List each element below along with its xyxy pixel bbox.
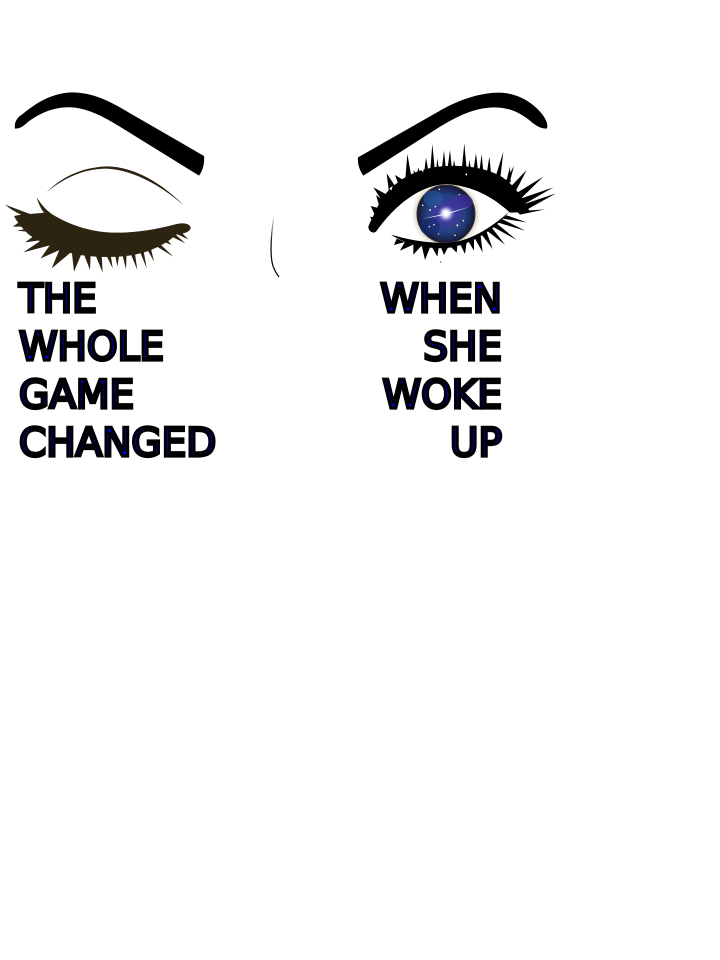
- right headline: [380, 277, 502, 466]
- right open eye: [368, 143, 556, 263]
- sclera: [378, 184, 508, 245]
- stray lash specks: [440, 261, 441, 263]
- left headline: CHANGED: [19, 421, 216, 466]
- left headline: GAME: [19, 373, 134, 418]
- lower lid line: [391, 212, 509, 248]
- sclera shading: [411, 179, 481, 249]
- closed eyelashes: [5, 205, 188, 273]
- left headline: [18, 277, 216, 466]
- upper lid crease: [47, 166, 184, 205]
- upper lash gaps: [389, 169, 467, 191]
- right headline: UP: [450, 421, 502, 466]
- closed eyelid band: [14, 197, 191, 257]
- right headline: WHEN: [380, 277, 502, 322]
- right headline: SHE: [423, 325, 502, 370]
- left eyebrow: [15, 92, 204, 176]
- left headline: THE: [18, 277, 97, 322]
- right headline: WOKE: [383, 373, 502, 418]
- left closed eye: [5, 166, 191, 273]
- galaxy iris: [417, 185, 475, 243]
- nose line: [271, 215, 279, 277]
- upper lashes: [370, 143, 556, 223]
- lower lashes: [394, 215, 527, 260]
- upper lid band: [368, 166, 530, 233]
- right eyebrow: [358, 93, 547, 176]
- left headline: WHOLE: [19, 325, 164, 370]
